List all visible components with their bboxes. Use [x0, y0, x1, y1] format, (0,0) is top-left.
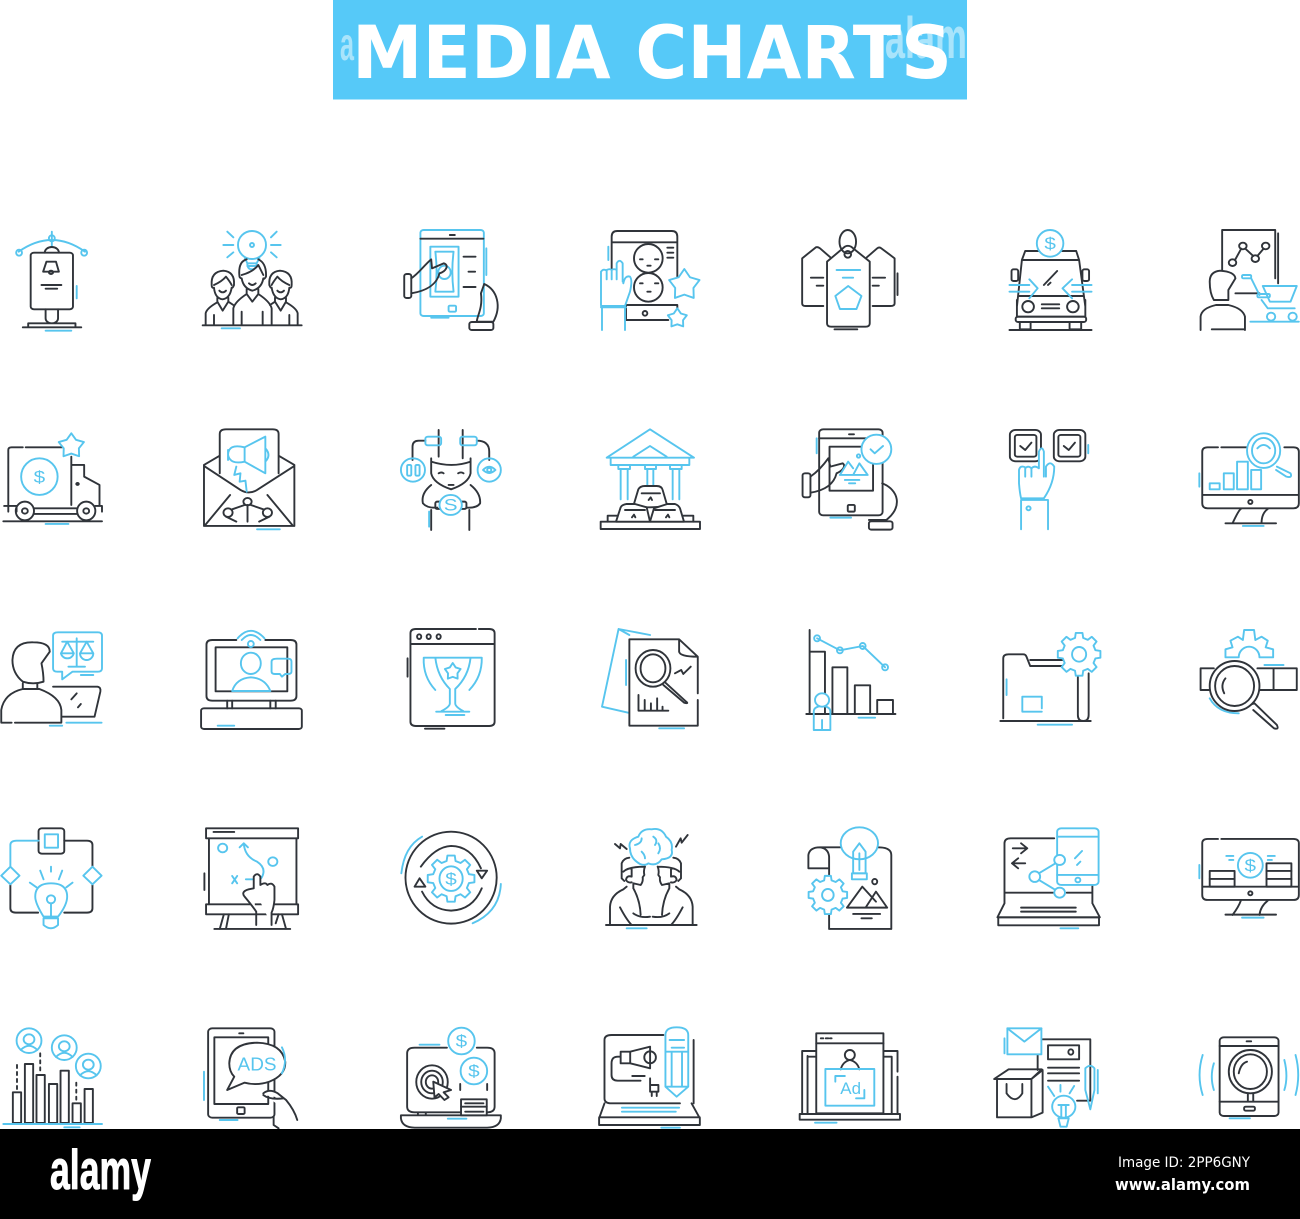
image id: Image ID: 2PP6GNY — [1118, 1155, 1250, 1171]
icon: delivery truck with dollar and star: $ — [34, 468, 46, 486]
footer bar — [0, 1129, 1300, 1219]
icon: laptop with phone and share nodes — [997, 828, 1100, 928]
icon: child with plugs, chart and eye — [401, 430, 501, 530]
icon: folder with gear — [1000, 633, 1100, 725]
icon: falling bar chart with person — [806, 630, 895, 730]
icon: phone with magnifier and vibration — [1200, 1037, 1298, 1118]
icon: monitor with dollar and stacks — [1199, 839, 1299, 918]
icon: tablet with ADS bubble and hand — [204, 1028, 297, 1128]
icon: dollar gear in circular arrows: $ — [445, 870, 457, 888]
icon: tablet with ADS bubble and hand: ADS — [238, 1055, 277, 1075]
icon: person with laptop and scales bubble — [1, 632, 102, 726]
icon: monitor with dollar and stacks: $ — [1245, 856, 1257, 875]
icon: car with dollar coin and arrows: $ — [1044, 234, 1056, 253]
icon: team with light bulb — [203, 231, 302, 328]
icon: laptop with target and coins: $ — [456, 1032, 468, 1050]
icon: price tags — [802, 230, 898, 329]
icon: car with dollar coin and arrows — [1009, 230, 1092, 330]
icon: laptop with target and coins: $ — [468, 1062, 480, 1080]
icon: envelope, bag, card and bulb — [994, 1028, 1098, 1127]
icon: monitor with video call person — [201, 631, 302, 729]
icon: hand selecting check boxes — [1010, 430, 1088, 529]
icon: phone with faces, hand and stars — [601, 231, 700, 330]
icon: browser with Ad banner: Ad — [840, 1079, 861, 1098]
footer logo: alamy — [50, 1138, 151, 1201]
icon: dollar gear in circular arrows — [401, 832, 501, 924]
icon: laptop with megaphone and pencil — [599, 1027, 700, 1128]
icon: presentation board with hand — [204, 828, 298, 929]
icon: billboard with bell — [16, 232, 87, 331]
icon: browser with Ad banner — [800, 1033, 900, 1123]
icon: child with plugs, chart and eye: S — [444, 496, 458, 514]
icon: monitor with bars and magnifier — [1199, 433, 1299, 526]
icon: flow chart with light bulb — [1, 828, 102, 928]
icon: scroll with bulb, gear and mountains — [808, 827, 891, 929]
icon: person with chart and shopping cart — [1201, 230, 1299, 330]
icon: tablet with money held in hands — [404, 230, 498, 330]
icon: laptop with target and coins — [401, 1028, 501, 1128]
icon: bank with gold bars — [601, 429, 700, 529]
icon: browser window with trophy — [408, 629, 495, 729]
icon: document with magnifier — [602, 629, 698, 728]
title banner: alam — [885, 6, 967, 71]
icon: envelope with megaphone — [204, 429, 294, 529]
title banner: MEDIA CHARTS — [352, 11, 952, 96]
title banner: a — [340, 18, 354, 70]
icon: magnifier with half gear — [1201, 630, 1297, 729]
website: www.alamy.com — [1115, 1175, 1250, 1194]
icon: two people with brain cloud — [606, 829, 697, 928]
icon: delivery truck with dollar and star — [3, 433, 102, 524]
icon: bar chart with users — [3, 1028, 102, 1127]
icon: tablet with image and check mark — [803, 429, 897, 530]
